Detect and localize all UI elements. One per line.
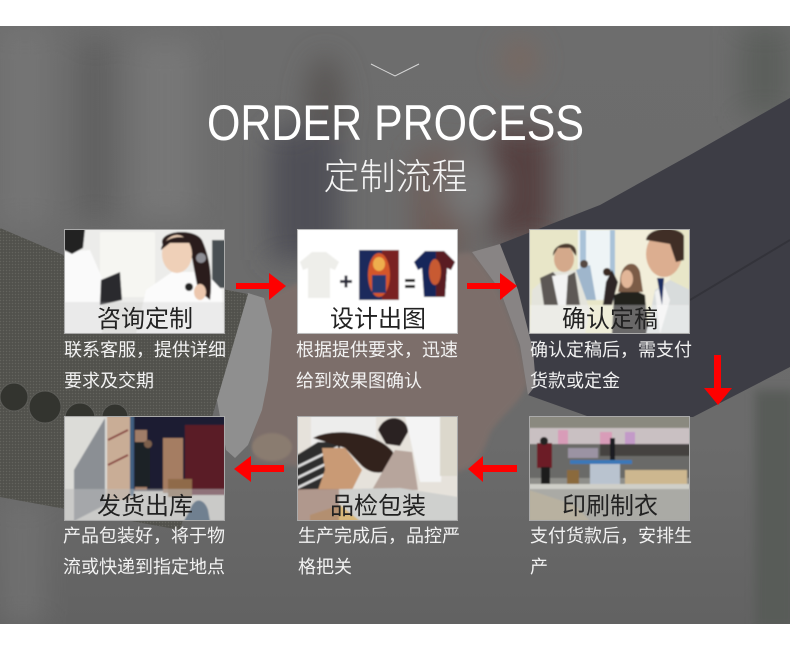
- right shirt cuff: [472, 244, 536, 395]
- description: 要求及交期: [64, 371, 154, 391]
- card border: [298, 230, 458, 334]
- description: 支付货款后，安排生: [530, 526, 692, 546]
- photo: customer service: [64, 229, 225, 334]
- arrow: step 2 to 3: [467, 273, 517, 300]
- arrow: step 3 to 4: [704, 355, 732, 405]
- arrow: step 5 to 6: [234, 456, 284, 482]
- step label: 印刷制衣: [562, 493, 658, 520]
- arrow: step 4 to 5: [468, 456, 517, 482]
- left jacket sleeve: [0, 228, 248, 530]
- description: 产: [530, 557, 548, 577]
- panel: step 4 print: [529, 416, 692, 577]
- right jacket sleeve: [500, 98, 790, 417]
- photo: business meeting: [529, 229, 690, 334]
- panel: step 1 consult: [64, 229, 226, 391]
- photo: truck loading: [64, 416, 225, 521]
- step label: 品检包装: [330, 493, 426, 520]
- fingernail: [252, 433, 292, 461]
- subtitle: 定制流程: [323, 156, 468, 197]
- description: 流或快递到指定地点: [63, 557, 225, 577]
- step label: 确认定稿: [562, 306, 658, 333]
- panel: step 2 design: [296, 229, 458, 391]
- card border: [530, 416, 690, 520]
- photo: garment factory: [529, 416, 690, 521]
- description: 产品包装好，将于物: [63, 526, 225, 546]
- hands: [252, 252, 528, 478]
- description: 给到效果图确认: [296, 371, 422, 391]
- step label: 设计出图: [330, 306, 426, 333]
- photo: tee plus poster: [297, 229, 458, 334]
- description: 货款或定金: [530, 371, 620, 391]
- description: 生产完成后，品控严: [298, 526, 460, 546]
- chevron ornament: [371, 64, 419, 76]
- photo: inspection and packing: [297, 416, 458, 521]
- step label: 发货出库: [97, 493, 193, 520]
- step label: 咨询定制: [97, 306, 193, 333]
- left shirt cuff: [217, 293, 272, 458]
- card border: [298, 416, 458, 520]
- panel: step 5 quality check: [297, 416, 460, 577]
- card border: [64, 230, 224, 334]
- title: ORDER PROCESS: [207, 95, 584, 151]
- description: 联系客服，提供详细: [64, 340, 226, 360]
- card border: [64, 416, 224, 520]
- description: 格把关: [298, 557, 352, 577]
- panel: step 3 confirm: [529, 229, 692, 391]
- jacket buttons: [0, 382, 128, 423]
- arrow: step 1 to 2: [236, 273, 286, 300]
- description: 确认定稿后，需支付: [530, 340, 692, 360]
- panel: step 6 shipping: [63, 416, 225, 577]
- card border: [530, 230, 690, 334]
- description: 根据提供要求，迅速: [296, 340, 458, 360]
